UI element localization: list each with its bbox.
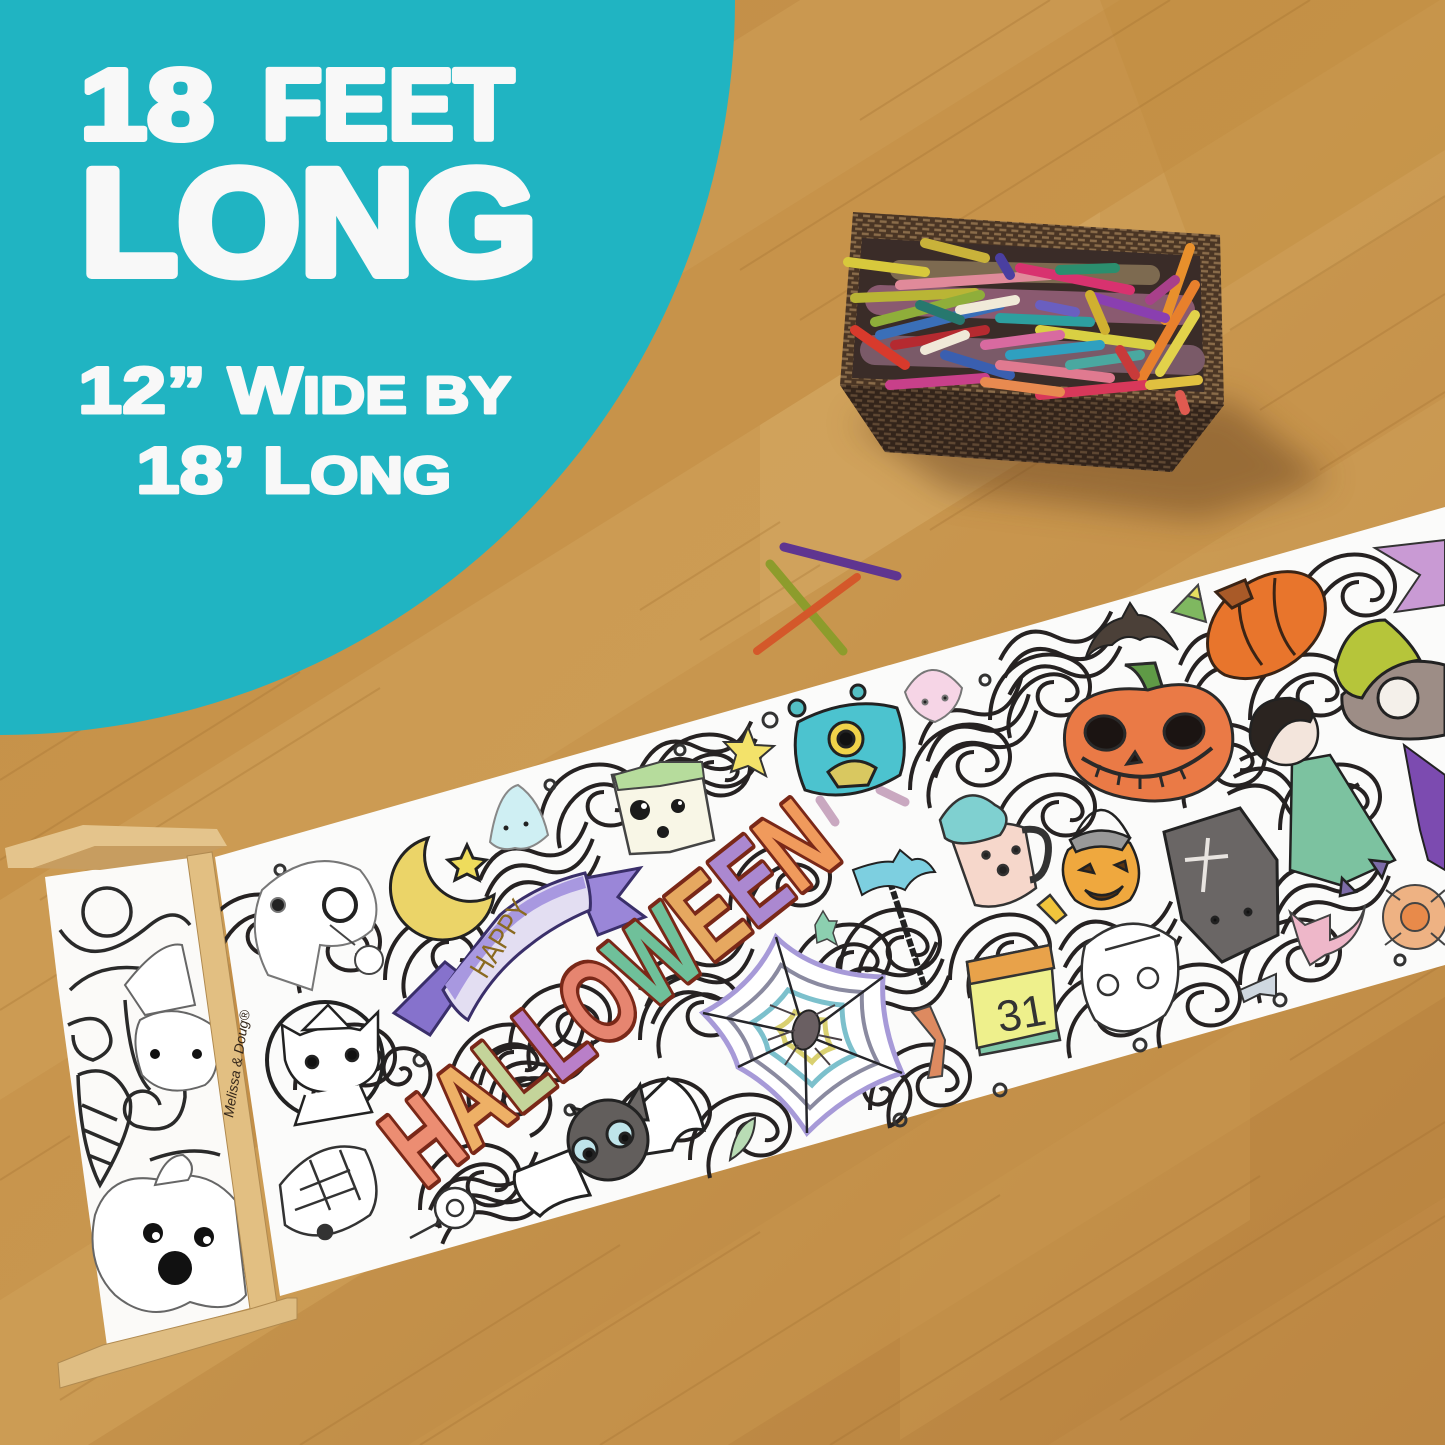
paper roll sheet [215, 507, 1445, 1296]
heading: 18 feet long [80, 49, 537, 306]
icon: vampire [1250, 698, 1395, 896]
icon: cauldron [1335, 620, 1445, 739]
icon: ghost [490, 785, 548, 849]
icon: lollipop [410, 1188, 475, 1238]
loose crayons [757, 547, 897, 651]
icon: pinecone candy apple [280, 1147, 376, 1239]
icon: bat [1085, 603, 1178, 660]
icon: spider web [703, 937, 902, 1133]
icon: outline ghost near roll [255, 861, 376, 990]
icon: yellow star [724, 727, 774, 776]
icon: purple hat right edge [1404, 745, 1445, 870]
icon: orange pumpkin [1208, 572, 1325, 679]
heading: 18 feet long: 18 [80, 49, 214, 161]
icon: candy wrapper [1240, 974, 1276, 1002]
subheading: dimensions: 12” W IDE BY [78, 353, 511, 427]
heading: 18 feet long: FEET [262, 49, 514, 161]
paper roll [45, 856, 250, 1346]
icon: cupcake [905, 670, 962, 722]
icon: mug [940, 795, 1066, 923]
icon: pumpkin bucket [1063, 810, 1139, 909]
icon: candy corn [1172, 585, 1206, 622]
icon: pink cat [1290, 905, 1365, 965]
icon: leaf [730, 1118, 755, 1160]
icon: lollipop left [330, 925, 383, 974]
icon: wrapped candy small [815, 911, 837, 945]
icon: calendar 31 [967, 945, 1060, 1055]
teal corner panel [0, 0, 735, 735]
icon: bat wand [853, 850, 935, 988]
icon: banner with HAPPY [394, 868, 645, 1035]
background swirls [200, 554, 1405, 1247]
icon: crescent moon and star [390, 838, 494, 940]
icon: coffin [1164, 808, 1278, 962]
wicker basket of crayons [840, 212, 1224, 472]
icon: frankenstein boy [1082, 924, 1178, 1031]
icon: witch cat [267, 1002, 383, 1125]
title lettering: HALLOWEEN: HALLOWEEN [359, 775, 860, 1210]
subheading: dimensions [78, 353, 511, 507]
heading: 18 feet long: LONG [81, 138, 537, 306]
icon: frankenstein block [612, 762, 714, 854]
icon: calendar 31: 31 [993, 986, 1050, 1042]
basket shadow [850, 400, 1330, 520]
icon: pumpkin flower [1383, 885, 1445, 949]
icon: grey bat [514, 1078, 704, 1216]
wooden holder with Melissa & Doug label [5, 825, 297, 1388]
subheading: dimensions: 18’ L ONG [136, 433, 451, 507]
icon: teal one-eyed monster [789, 685, 905, 822]
wooden holder with Melissa & Doug label: Melissa & Doug® [220, 1008, 253, 1118]
icon: big jack-o-lantern [1064, 663, 1233, 801]
icon: banner with HAPPY: HAPPY [464, 894, 537, 984]
icon: purple witch hat top right [1375, 540, 1445, 612]
icon: candy [912, 1006, 945, 1078]
